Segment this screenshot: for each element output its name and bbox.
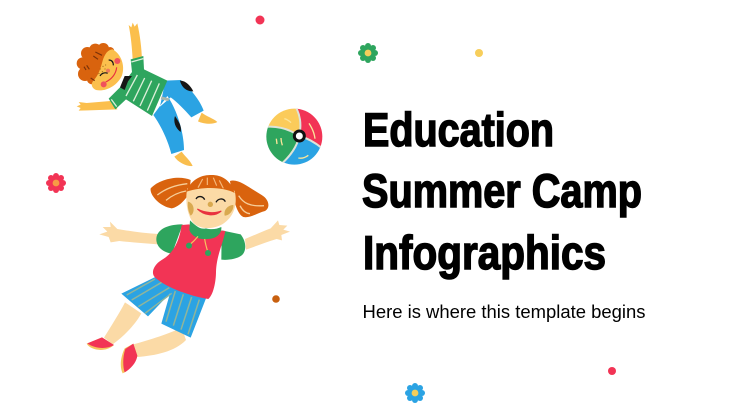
girl hair	[151, 178, 268, 217]
dot: yellow	[475, 49, 483, 57]
title: Education	[363, 103, 554, 156]
girl face	[186, 183, 236, 228]
boy face	[92, 49, 123, 90]
title	[362, 103, 642, 279]
boy facial details	[84, 52, 120, 87]
girl collar with drawstrings	[186, 220, 221, 256]
girl red top	[153, 224, 225, 299]
trouser patches	[174, 81, 193, 132]
boy striped shirt	[109, 56, 167, 116]
title: Infographics	[363, 226, 606, 279]
ball red panel	[296, 108, 322, 147]
girl fringe and facial details	[157, 175, 264, 216]
flower: green	[358, 43, 378, 63]
boy arms	[77, 23, 142, 111]
girl shoes	[87, 337, 137, 373]
boy feet	[174, 113, 217, 166]
subtitle: Here is where this template begins	[362, 302, 646, 322]
title: Summer Camp	[362, 164, 642, 217]
ball yellow panel	[268, 108, 300, 132]
illustration: beach ball	[266, 108, 322, 165]
dot: red top	[256, 16, 264, 24]
dot: red bottom	[608, 367, 616, 375]
flower: blue	[405, 383, 425, 403]
ball green panel	[266, 126, 296, 162]
boy trousers	[153, 80, 204, 154]
girl striped shorts	[121, 277, 206, 338]
flower: red	[46, 173, 66, 193]
boy hair	[77, 43, 114, 84]
boy collar	[120, 76, 132, 90]
ball hub	[294, 131, 304, 141]
girl arms	[99, 220, 290, 250]
illustration: boy with green striped shirt	[77, 23, 217, 166]
ball blue panel	[283, 139, 320, 165]
dot: orange	[272, 295, 280, 303]
slide canvas	[46, 16, 645, 403]
ball seams	[268, 108, 320, 162]
girl legs	[104, 302, 186, 357]
girl green sleeves	[156, 224, 245, 260]
ball highlights	[276, 119, 315, 158]
illustration: girl with red top	[87, 175, 290, 373]
